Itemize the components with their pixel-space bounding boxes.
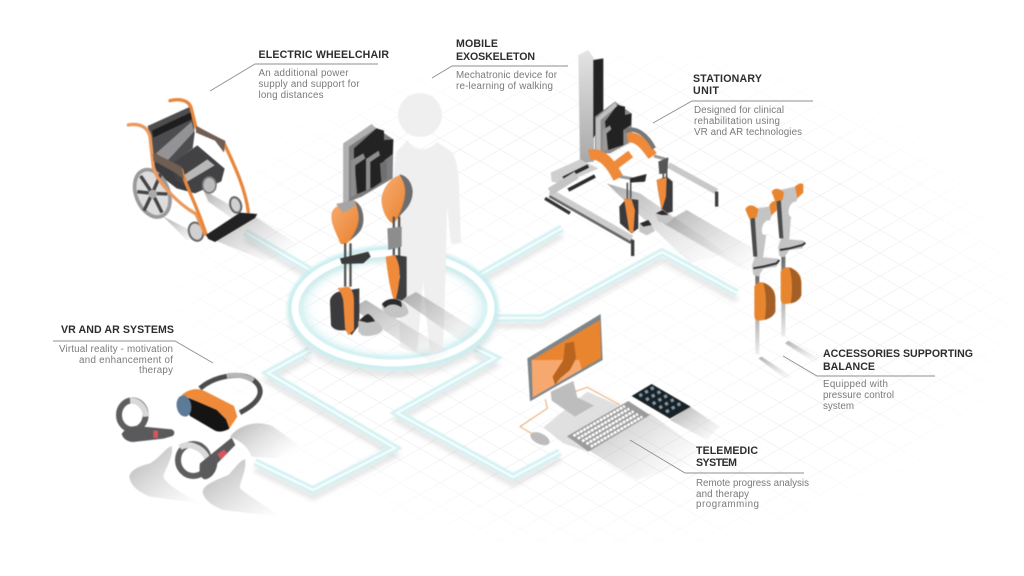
backpack <box>595 102 632 153</box>
vr and ar systems <box>119 375 303 517</box>
under-seat frame <box>151 155 195 193</box>
label: vr and ar systems <box>53 324 213 376</box>
description: programming <box>696 499 759 510</box>
description <box>59 344 173 376</box>
glowing connectors <box>245 228 737 497</box>
heading: TELEMEDIC <box>696 445 758 457</box>
phone <box>632 384 691 419</box>
heading: MOBILE <box>456 38 498 50</box>
description: rehabilitation using <box>694 116 780 127</box>
label: stationary unit <box>653 73 813 138</box>
headset <box>200 375 260 413</box>
leader line <box>653 101 813 123</box>
base <box>551 159 598 184</box>
stationary unit <box>545 50 783 270</box>
mouse <box>528 429 552 448</box>
leader line <box>432 66 568 78</box>
description <box>456 70 558 92</box>
rear crutch <box>772 183 805 337</box>
stand <box>551 381 594 417</box>
description: and therapy <box>696 489 749 500</box>
artwork <box>119 50 822 517</box>
small wheels <box>186 221 206 243</box>
heading <box>696 445 758 469</box>
orange frame <box>128 100 248 234</box>
description: supply and support for <box>258 79 360 90</box>
description: Virtual reality - motivation <box>59 344 173 355</box>
large wheel <box>128 164 177 222</box>
description <box>696 478 809 510</box>
label: accessories supporting balance <box>783 348 973 412</box>
frame rails <box>545 165 717 256</box>
backrest <box>148 106 195 166</box>
heading: SYSTEM <box>696 457 737 469</box>
left thigh <box>331 201 363 244</box>
description: Equipped with <box>823 379 888 390</box>
label: electric wheelchair <box>210 49 389 101</box>
cables <box>520 387 620 435</box>
wheelchair shadows <box>203 190 257 223</box>
accessories: crutches <box>745 183 822 378</box>
isometric floor grid <box>232 80 965 521</box>
description: Remote progress analysis <box>696 478 809 489</box>
crutch shadows <box>758 357 795 378</box>
description: pressure control <box>823 390 894 401</box>
description <box>258 68 360 101</box>
front crutch <box>745 201 779 354</box>
description: VR and AR technologies <box>694 127 802 138</box>
heading: ACCESSORIES SUPPORTING <box>823 348 973 360</box>
heading: BALANCE <box>823 361 875 373</box>
right controller <box>178 438 235 479</box>
description: therapy <box>139 365 173 376</box>
label: telemedic system <box>630 440 809 510</box>
description: long distances <box>258 90 324 101</box>
heading: ELECTRIC WHEELCHAIR <box>258 49 389 61</box>
orange thigh cuffs <box>589 154 618 178</box>
leader line <box>630 440 804 473</box>
description <box>823 379 894 412</box>
description: system <box>823 401 854 412</box>
description: and enhancement of <box>79 355 173 366</box>
heading: UNIT <box>693 85 720 97</box>
knee joints <box>344 217 400 287</box>
desk shadows <box>543 392 622 452</box>
description: An additional power <box>258 68 349 79</box>
monitor <box>527 314 603 401</box>
arm rests <box>153 153 184 179</box>
human silhouette and shadows <box>352 93 480 362</box>
heading <box>823 348 973 373</box>
column <box>578 50 594 163</box>
right lower leg <box>395 255 407 303</box>
person silhouette <box>392 93 461 354</box>
telemedic system <box>520 314 720 480</box>
description: re-learning of walking <box>456 81 553 92</box>
heading: STATIONARY <box>693 73 762 85</box>
label: mobile exoskeleton <box>432 38 568 92</box>
footplate <box>206 213 257 242</box>
heading <box>456 38 535 63</box>
electric wheelchair <box>128 100 307 260</box>
heading <box>693 73 762 97</box>
leader line <box>210 64 378 91</box>
seat <box>169 145 225 193</box>
description: Mechatronic device for <box>456 70 558 81</box>
glowing ring platform <box>293 252 493 373</box>
heading: VR AND AR SYSTEMS <box>61 324 174 336</box>
description: Designed for clinical <box>694 105 784 116</box>
floor shadows of the user <box>352 300 450 362</box>
leader line <box>53 341 213 363</box>
left controller <box>119 400 174 442</box>
heading: EXOSKELETON <box>456 51 535 63</box>
keyboard <box>567 401 650 452</box>
mobile exoskeleton <box>330 124 413 336</box>
unit floor shadows <box>607 183 727 263</box>
vr shadows <box>129 446 200 503</box>
left lower leg <box>330 288 359 335</box>
right thigh <box>381 176 411 223</box>
leader line <box>783 356 935 376</box>
description <box>694 105 802 138</box>
legs <box>627 173 667 198</box>
